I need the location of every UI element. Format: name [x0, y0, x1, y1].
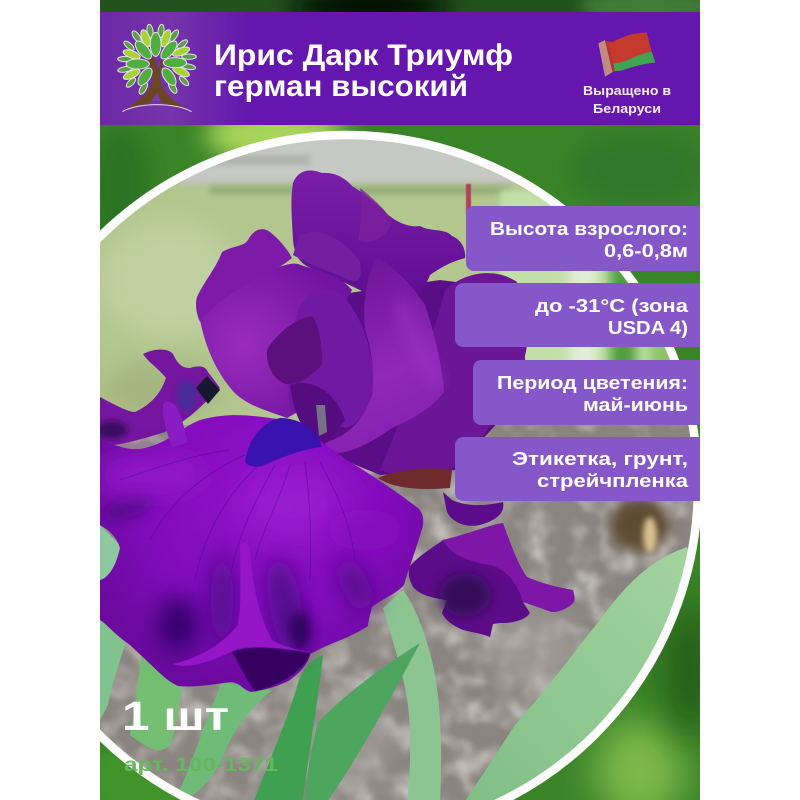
card: bloom period: [473, 360, 713, 425]
origin caption: Выращено в: [583, 84, 671, 98]
top petal: [291, 170, 465, 308]
card: packaging: стрейчпленка: [537, 471, 689, 491]
left back petal: [100, 350, 220, 447]
card: height: [466, 206, 716, 271]
finger ridge near petal base: [163, 402, 188, 448]
central ridge: [172, 543, 312, 666]
product card background: [100, 0, 700, 800]
card: bloom period: май-июнь: [583, 395, 688, 415]
card: packaging: Этикетка, грунт,: [512, 449, 688, 469]
left standard petal: [200, 264, 352, 418]
icon: Belarus flag: [598, 33, 655, 77]
lower right flower: [443, 492, 503, 526]
card: hardiness: USDA 4): [608, 318, 688, 338]
leaves: [100, 525, 690, 800]
center right standard petal: [325, 258, 444, 453]
large lower fall petal with soft folds: [95, 415, 423, 692]
blurred green backdrop: [80, 0, 720, 800]
back right petal: [380, 273, 528, 475]
card: height: 0,6-0,8м: [604, 241, 688, 261]
calyx: [378, 468, 452, 489]
card: height: Высота взрослого:: [490, 219, 688, 239]
card: packaging: [455, 437, 715, 501]
origin caption: Беларуси: [593, 102, 661, 116]
origin caption: [583, 84, 671, 116]
article number: арт. 100-1371: [124, 755, 279, 776]
title: герман высокий: [214, 70, 468, 103]
flower base mass: [325, 280, 525, 475]
circular photo of iris: [100, 139, 694, 800]
header band: [100, 12, 700, 125]
top-left small petal: [196, 229, 292, 322]
quantity label: 1 шт: [122, 693, 229, 739]
fold pocket at bottom of fall: [232, 648, 310, 691]
beard: [245, 418, 322, 467]
logo: tree: [117, 24, 196, 112]
card: hardiness: до -31°C (зона: [535, 296, 689, 316]
photo background: lawn, fence and soil: [100, 139, 694, 800]
iris flower: [95, 170, 574, 692]
white circle ring: [100, 130, 700, 800]
card: bloom period: Период цветения:: [497, 373, 688, 393]
title: Ирис Дарк Триумф: [214, 39, 513, 72]
veins: [120, 450, 355, 590]
card: hardiness: [455, 283, 715, 347]
title: [214, 39, 513, 103]
inner standard folds: [288, 290, 374, 428]
